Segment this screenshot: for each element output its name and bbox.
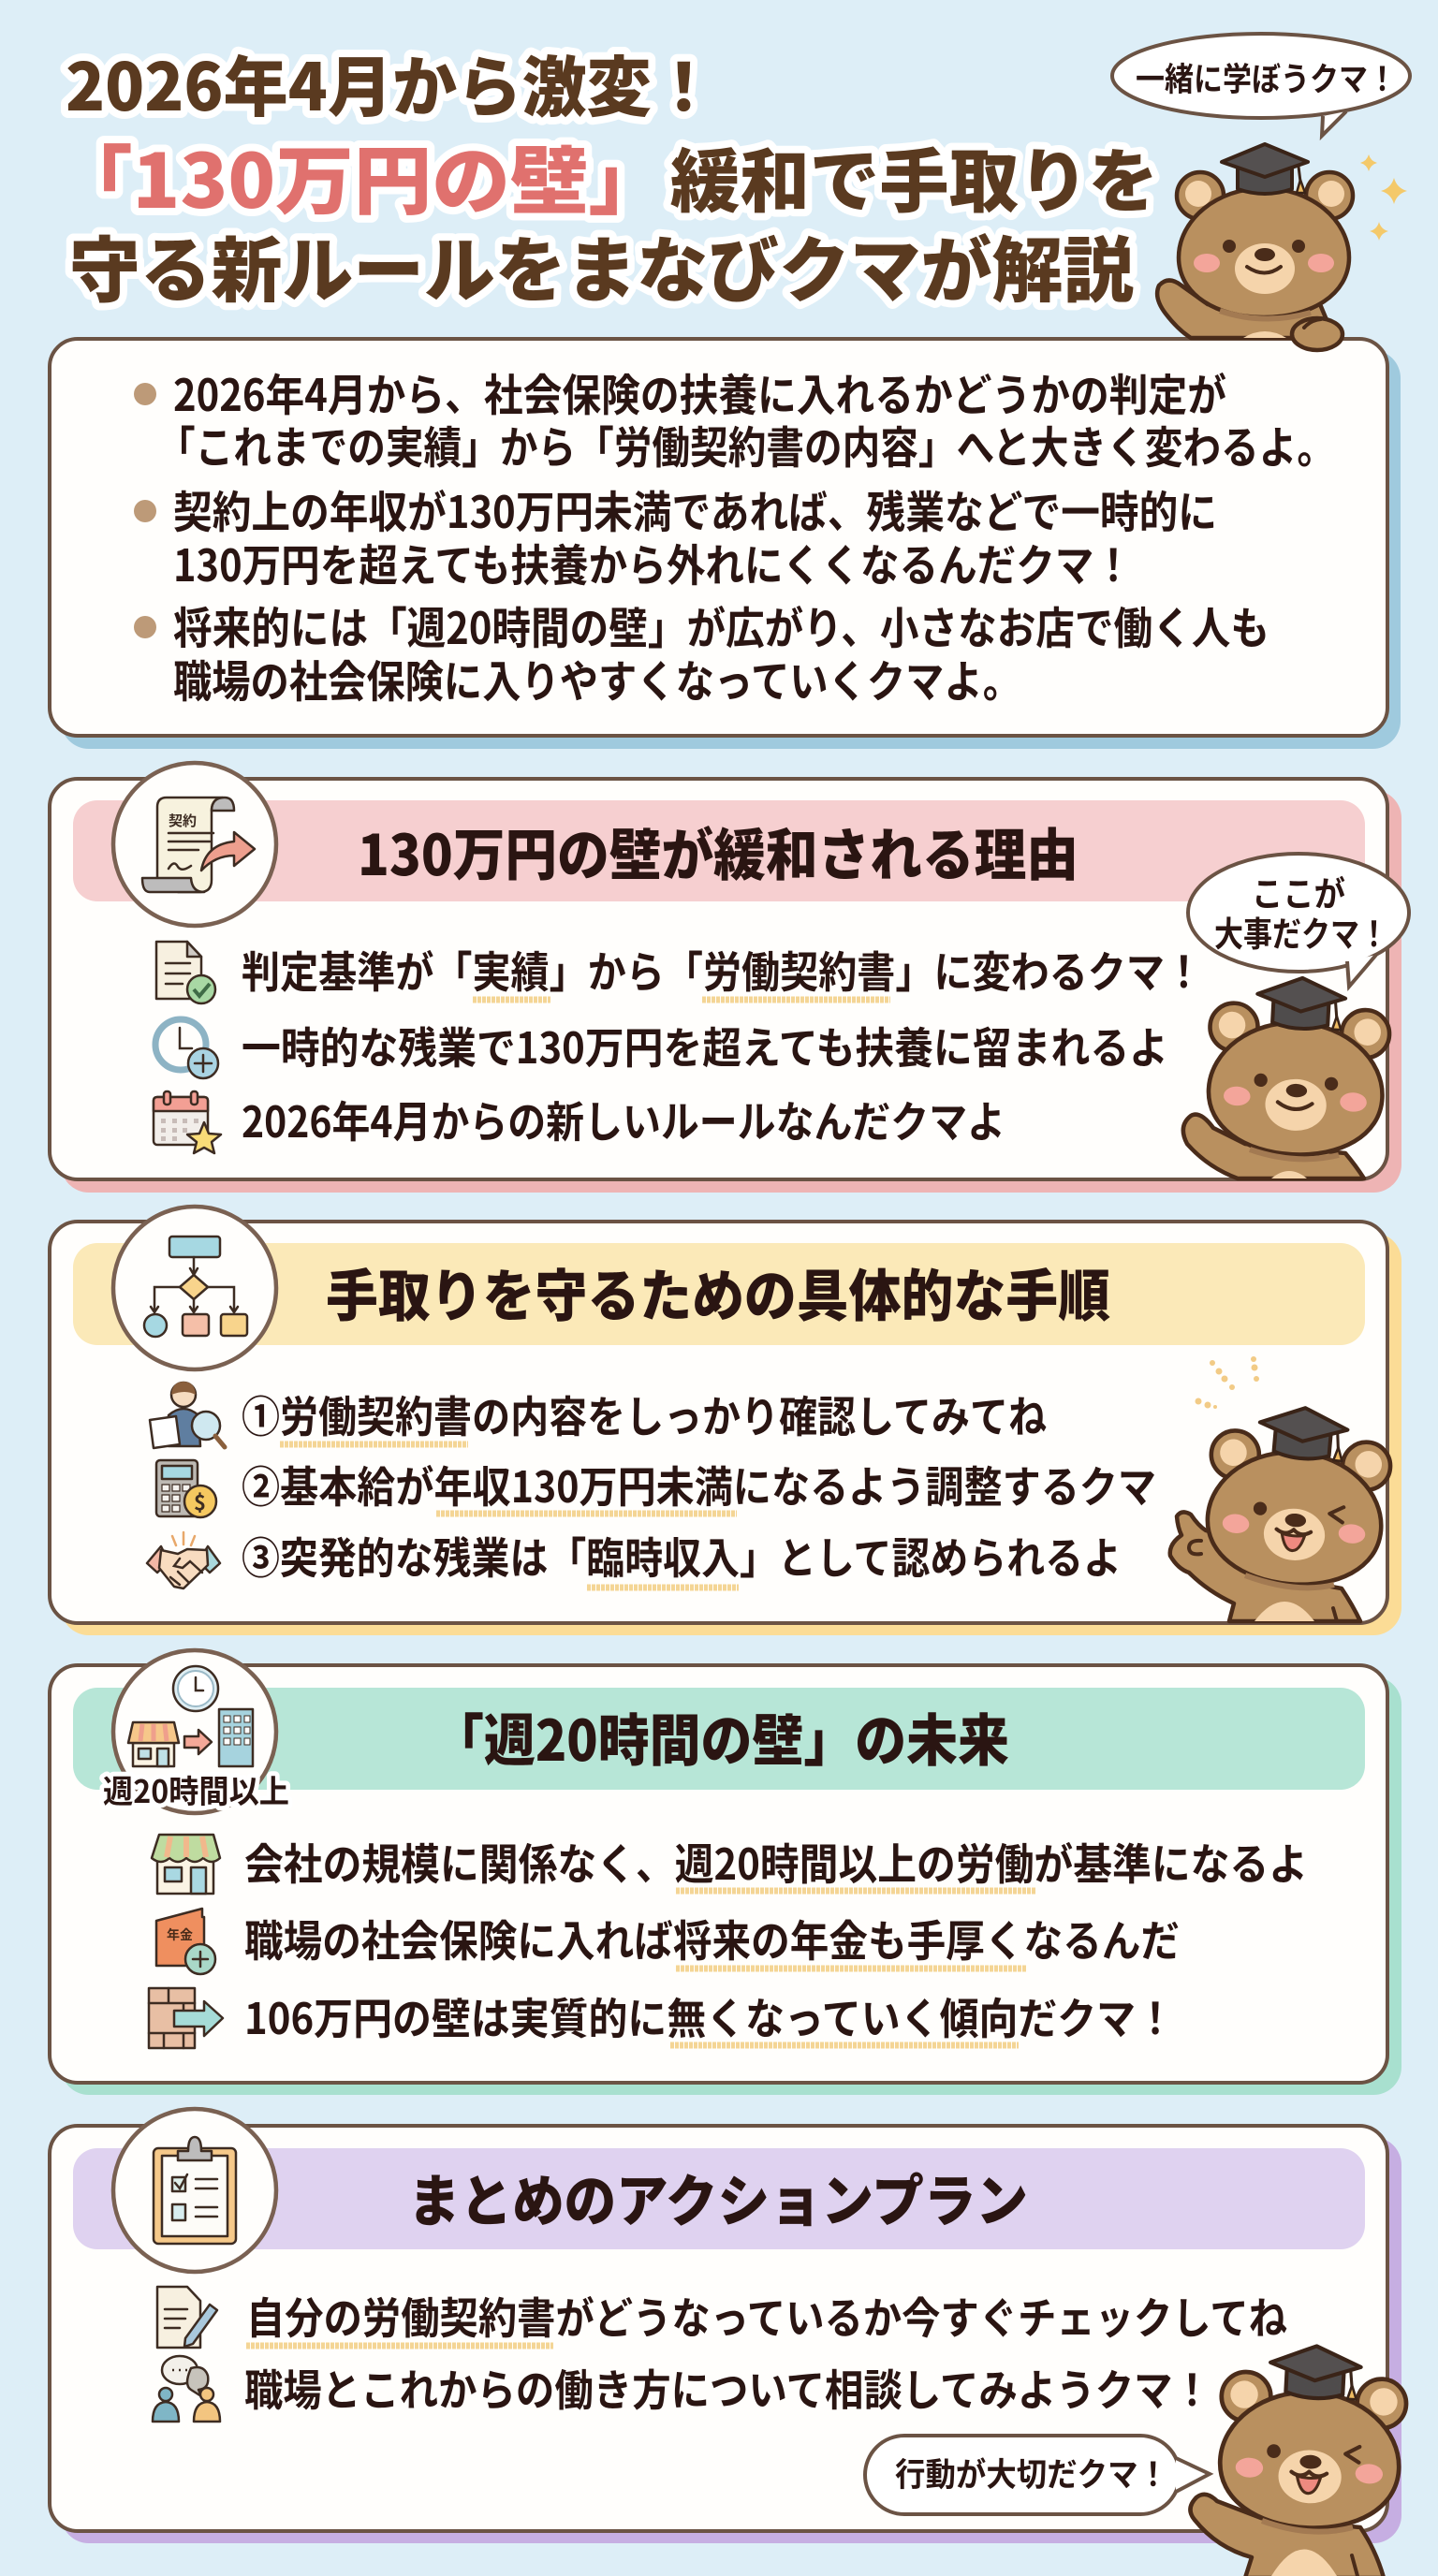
heading: 手取りを守るための具体的な手順 <box>326 1251 1110 1333</box>
icon circle: contract with arrow <box>113 763 276 926</box>
row 1 text: 自分の労働契約書がどうなっているか今すぐチェックしてね <box>246 2285 1287 2347</box>
row 2 text: 一時的な残業で130万円を超えても扶養に留まれるよ <box>242 1015 1168 1076</box>
underline <box>676 1887 1035 1895</box>
row 3 icon: handshake <box>147 1532 220 1588</box>
speech bubble: this is important <box>1188 854 1409 987</box>
bear: panel 1 waving <box>1183 973 1392 1178</box>
title line 3: 守る新ルールをまなびクマが解説 <box>69 213 1134 316</box>
row 1 icon: document and pen <box>157 2287 217 2348</box>
panel: why the wall is relaxed <box>50 763 1401 1193</box>
icon circle: contract with arrow: 契約 <box>169 811 197 830</box>
heading: 「週20時間の壁」の未来 <box>433 1696 1009 1778</box>
heading: まとめのアクションプラン <box>408 2157 1028 2238</box>
row 3 text: 106万円の壁は実質的に無くなっていく傾向だクマ！ <box>244 1985 1175 2047</box>
row 2 text: 職場とこれからの働き方について相談してみようクマ！ <box>244 2357 1211 2419</box>
title line 1: 2026年4月から激変！ <box>66 36 716 130</box>
speech bubble: this is important: ここが <box>1252 866 1345 916</box>
speech bubble: learn together: 一緒に学ぼうクマ！ <box>1136 53 1397 101</box>
bear: top waving <box>1157 144 1353 350</box>
bear: panel 2 pointing with dots <box>1170 1356 1395 1621</box>
icon circle: flowchart <box>113 1207 276 1369</box>
row 3 icon: wall with arrow <box>149 1988 223 2048</box>
bullet text 2: 契約上の年収が130万円未満であれば、残業などで一時的に <box>173 476 1217 541</box>
row 2 icon: people talking <box>153 2356 220 2422</box>
icon circle: clock shop building <box>113 1650 276 1813</box>
speech bubble: action matters: 行動が大切だクマ！ <box>895 2449 1168 2496</box>
heading band <box>73 1688 1365 1790</box>
underline <box>676 1966 1026 1971</box>
underline <box>702 996 890 1003</box>
row 3 text: 2026年4月からの新しいルールなんだクマよ <box>242 1089 1005 1150</box>
row 1 icon: person with magnifier <box>150 1382 225 1448</box>
icon label: 週20時間以上 <box>103 1766 289 1812</box>
row 1 text: 会社の規模に関係なく、週20時間以上の労働が基準になるよ <box>244 1831 1308 1893</box>
row 2 icon: calculator and coin: $ <box>194 1486 206 1516</box>
heading band <box>73 800 1365 901</box>
row 2 text: 職場の社会保険に入れば将来の年金も手厚くなるんだ <box>244 1908 1180 1969</box>
row 1 text: ①労働契約書の内容をしっかり確認してみてね <box>242 1383 1047 1445</box>
underline <box>473 996 550 1003</box>
speech bubble: this is important: 大事だクマ！ <box>1214 906 1388 957</box>
speech bubble: learn together <box>1112 34 1410 136</box>
title line 2 rest: 緩和で手取りを <box>670 126 1158 227</box>
underline <box>670 2042 1019 2048</box>
underline <box>280 1442 468 1447</box>
speech bubble: action matters <box>865 2436 1210 2514</box>
row 3 text: ③突発的な残業は「臨時収入」として認められるよ <box>242 1525 1122 1587</box>
bullet text 1: 2026年4月から、社会保険の扶養に入れるかどうかの判定が <box>173 359 1226 424</box>
panel: future of 20-hour wall <box>50 1650 1401 2095</box>
bullet text 3: 将来的には「週20時間の壁」が広がり、小さなお店で働く人も <box>173 593 1269 657</box>
row 3 icon: calendar star <box>154 1091 221 1153</box>
sparkles <box>1360 154 1407 241</box>
underline <box>587 1584 739 1591</box>
panel: summary: 職場の社会保険に入りやすくなっていくクマよ。 <box>173 646 1021 710</box>
row 2 icon: clock plus <box>155 1019 218 1078</box>
row 2 text: ②基本給が年収130万円未満になるよう調整するクマ <box>242 1454 1156 1515</box>
title <box>54 36 1158 316</box>
underline <box>246 2342 553 2349</box>
row 2 icon: pension book: 年金 <box>167 1925 193 1944</box>
panel: summary: 130万円を超えても扶養から外れにくくなるんだクマ！ <box>173 530 1133 594</box>
row 1 icon: shop <box>152 1835 220 1894</box>
row 2 icon: pension book <box>156 1909 215 1974</box>
row 1 icon: document check <box>156 942 215 1003</box>
panel: action plan <box>50 2109 1401 2543</box>
bullet 1 <box>134 383 156 405</box>
row 2 icon: calculator and coin <box>156 1460 216 1517</box>
icon circle: clipboard <box>113 2109 276 2272</box>
row 1 text: 判定基準が「実績」から「労働契約書」に変わるクマ！ <box>242 939 1203 1001</box>
heading band <box>73 1243 1365 1345</box>
underline <box>436 1511 737 1516</box>
bullet 3 <box>134 616 156 638</box>
panel: summary <box>50 339 1401 749</box>
bullet 2 <box>134 500 156 522</box>
bear: bottom winking <box>1190 2341 1409 2576</box>
title line 2 highlighted: 「130万円の壁」 <box>54 122 667 230</box>
heading band <box>73 2148 1365 2249</box>
heading: 130万円の壁が緩和される理由 <box>358 811 1078 892</box>
panel: concrete steps <box>50 1207 1401 1635</box>
